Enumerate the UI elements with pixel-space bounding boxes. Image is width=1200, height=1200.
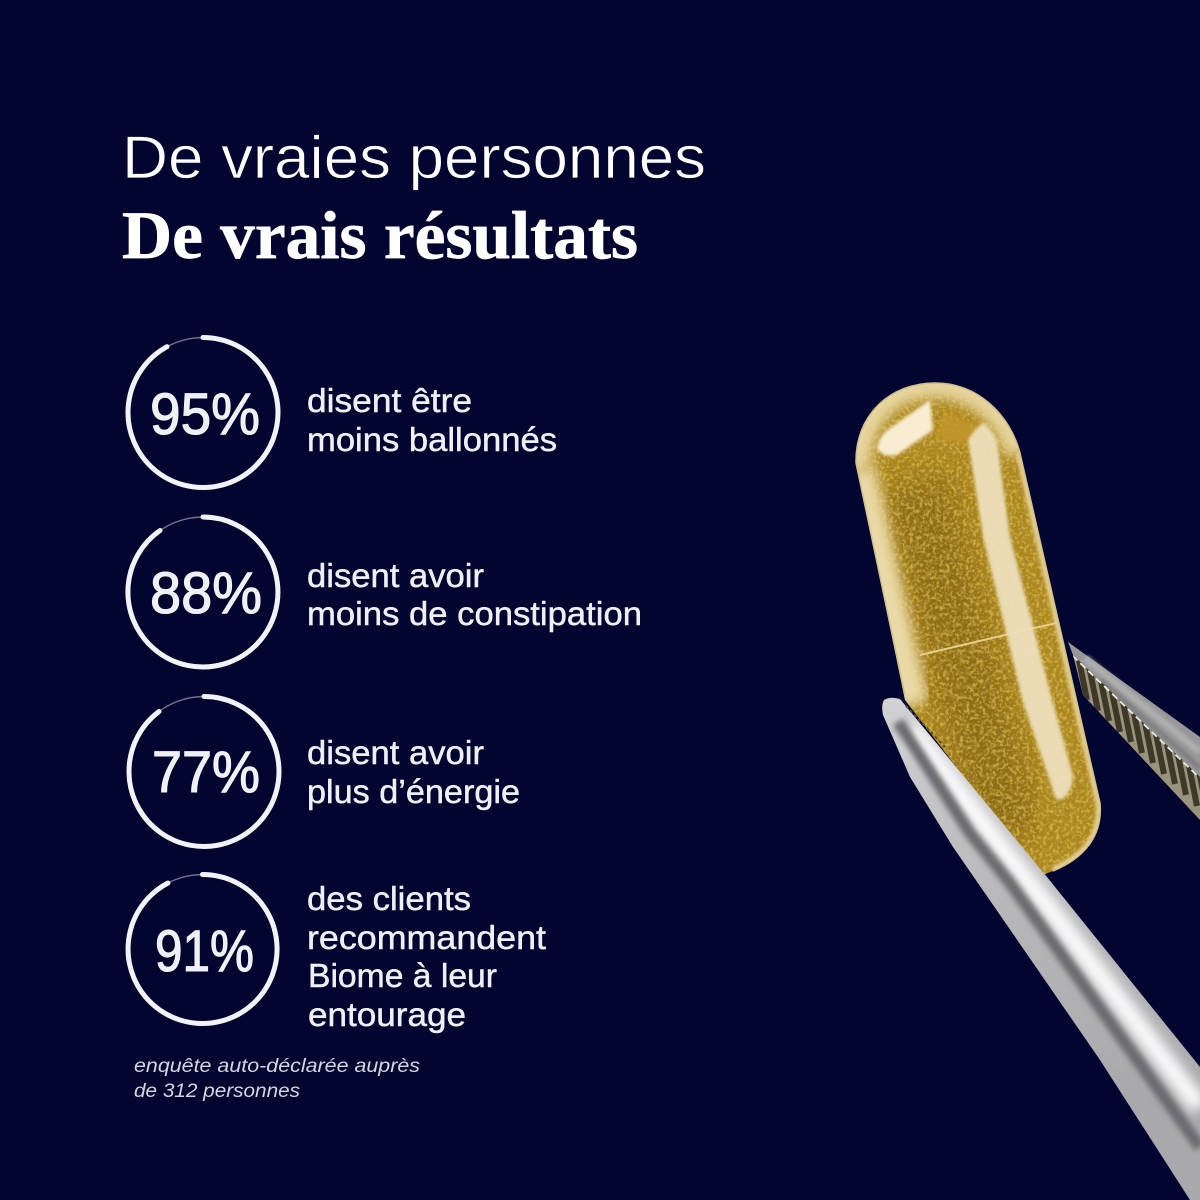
stat: 95% [128,338,557,488]
powder fill [857,389,1098,874]
tweezers: front blade [882,698,1200,1200]
value: 95%: 95% [150,382,260,447]
shell: dome [856,383,1020,470]
serrated teeth [1070,650,1200,825]
title line: bold serif: De vrais résultats [122,197,638,273]
description: 95%: moins ballonnés [307,421,557,458]
value: 77%: 77% [152,740,260,805]
footnote: enquête auto-déclarée auprès [134,1056,421,1077]
capsule [855,382,1102,874]
description: 88%: disent avoir [307,557,484,594]
highlight: top reflection [877,400,933,456]
powder patch at the dome [936,413,976,445]
blade gripping edge [906,706,945,747]
highlight: long strip [968,423,1073,800]
shell: right wall [1020,453,1100,871]
seam [920,622,1060,655]
description: 91%: entourage [308,996,466,1033]
ring: 91% [128,874,277,1024]
description: 91%: recommandent [307,919,546,956]
description: 95% [307,382,557,458]
dark stripe [898,722,1200,1147]
title [122,124,706,273]
shell: left wall [858,470,912,705]
footnote [134,1056,421,1102]
description: 77%: disent avoir [307,734,484,771]
footnote: de 312 personnes [134,1081,301,1102]
value: 88%: 88% [150,561,262,626]
stat: 88% [128,517,642,667]
value: 91%: 91% [155,919,254,984]
capsule rim [856,383,1100,871]
tweezers: back blade [1068,642,1200,825]
description: 77% [307,734,520,810]
ring: 77% [129,696,279,846]
description: 91% [307,880,546,1033]
description: 95%: disent être [307,382,472,419]
title line: light: De vraies personnes [122,124,706,191]
description: 77%: plus d’énergie [307,773,520,810]
description: 91%: Biome à leur [308,957,497,994]
stat: 77% [129,696,520,846]
description: 91%: des clients [307,880,471,917]
stat: 91% [128,874,546,1033]
description: 88%: moins de constipation [307,595,642,632]
description: 88% [307,557,642,632]
highlight stripe [910,730,1200,1107]
ring: 95% [128,338,278,488]
ring: 88% [128,517,278,667]
